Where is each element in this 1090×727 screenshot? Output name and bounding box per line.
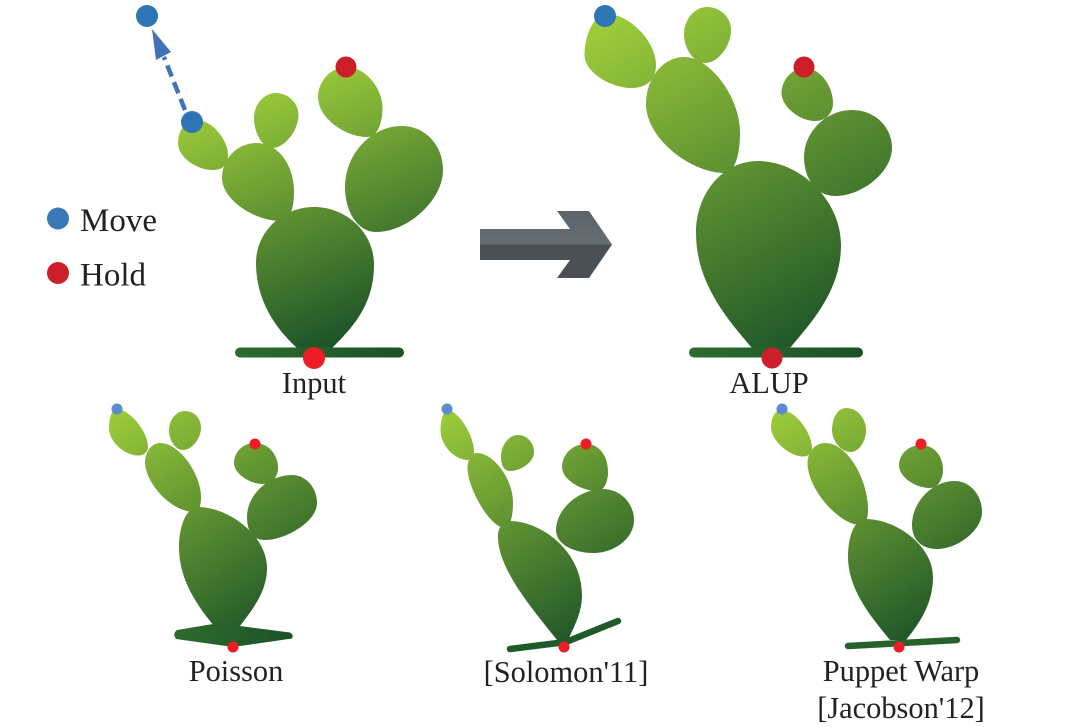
arrow: move direction bbox=[152, 29, 185, 110]
legend: Move bbox=[80, 203, 157, 239]
label: Poisson: Poisson bbox=[189, 654, 283, 688]
label: ALUP: ALUP bbox=[729, 366, 809, 400]
Poisson cactus bbox=[109, 409, 317, 647]
ALUP cactus bbox=[584, 7, 892, 358]
label: Puppet Warp: [Jacobson'12] bbox=[817, 691, 985, 725]
label: Puppet Warp bbox=[817, 654, 985, 725]
label: Puppet Warp: Puppet Warp bbox=[823, 654, 979, 688]
big arrow bbox=[480, 211, 612, 278]
label: Solomon: [Solomon'11] bbox=[484, 655, 648, 689]
input cactus bbox=[178, 67, 443, 358]
label: input: Input bbox=[282, 366, 347, 400]
Puppet Warp cactus bbox=[771, 408, 982, 646]
Puppet Warp handles bbox=[776, 404, 926, 652]
Poisson handles bbox=[112, 404, 260, 652]
Solomon cactus bbox=[440, 410, 634, 649]
legend: Hold bbox=[80, 258, 146, 294]
legend bbox=[47, 203, 157, 294]
input handles bbox=[136, 5, 356, 369]
Solomon handles bbox=[442, 404, 592, 652]
ALUP handles bbox=[594, 5, 814, 368]
